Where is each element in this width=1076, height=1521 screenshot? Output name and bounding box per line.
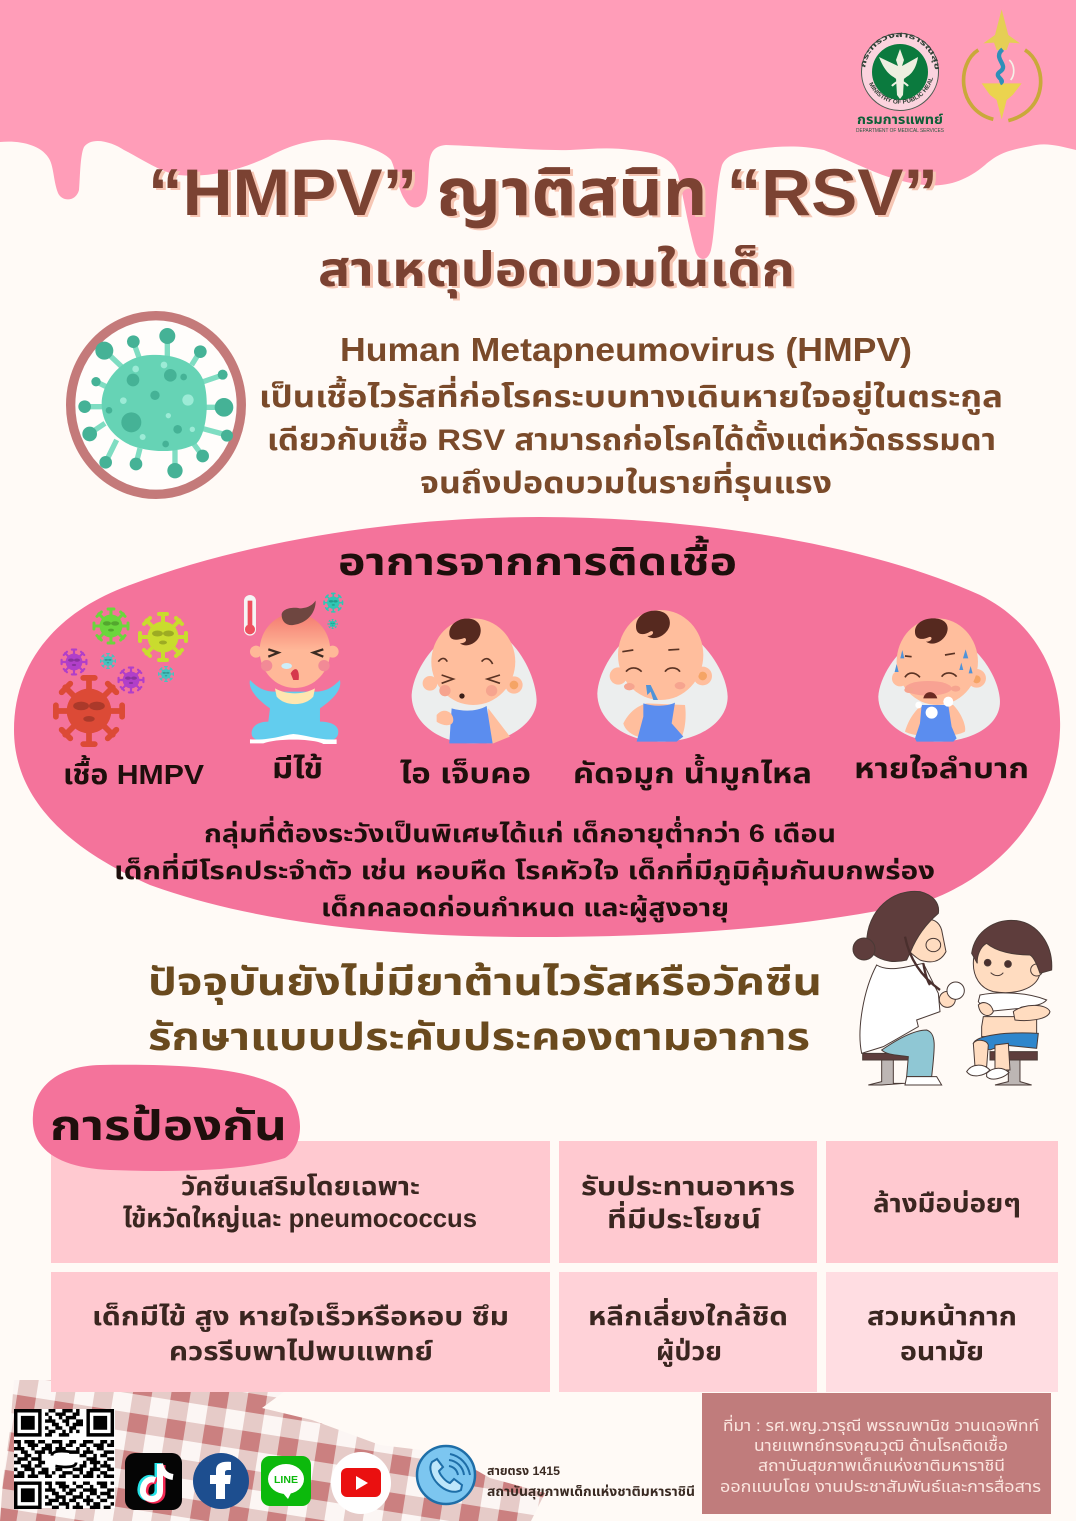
card: nutrition: รับประทานอาหาร <box>581 1171 795 1201</box>
card: see a doctor: ควรรีบพาไปพบแพทย์ <box>169 1336 433 1366</box>
card: vaccines <box>51 1141 550 1263</box>
icon: coughing baby <box>412 618 537 743</box>
source box: นายแพทย์ทรงคุณวุฒิ ด้านโรคติดเชื้อ <box>754 1434 1008 1455</box>
logo: Department of Medical Services: DEPARTMENT OF MEDICAL SERVICES <box>856 128 945 134</box>
treatment statement: ปัจจุบันยังไม่มียาต้านไวรัสหรือวัคซีน <box>148 962 822 1005</box>
panel: symptoms <box>14 517 1060 937</box>
card: nutrition: ที่มีประโยชน์ <box>607 1201 761 1234</box>
source box: สถาบันสุขภาพเด็กแห่งชาติมหาราชินี <box>758 1457 1005 1475</box>
icon: HMPV virus in ring <box>71 316 241 494</box>
panel: prevention cards <box>51 1141 1058 1392</box>
risk groups text: เด็กคลอดก่อนกำหนด และผู้สูงอายุ <box>321 894 729 923</box>
icon: baby with runny nose <box>597 610 728 742</box>
icon: LINE <box>261 1456 311 1506</box>
treatment statement: รักษาแบบประคับประคองตามอาการ <box>148 1017 810 1059</box>
intro text block: เดียวกับเชื้อ RSV สามารถก่อโรคได้ตั้งแต่หวัดธรรมดา <box>267 418 996 457</box>
card: wear a mask: อนามัย <box>900 1336 984 1366</box>
card: wear a mask <box>826 1272 1058 1392</box>
icon: baby with fever <box>244 593 343 744</box>
card: see a doctor: เด็กมีไข้ สูง หายใจเร็วหรือหอบ ซึม <box>92 1301 509 1332</box>
QR code <box>14 1409 115 1509</box>
hotline text: สายตรง 1415 <box>487 1464 560 1478</box>
card: avoid patients: หลีกเลี่ยงใกล้ชิด <box>588 1298 788 1331</box>
intro text block <box>259 331 1003 501</box>
prevention heading pill: การป้องกัน <box>50 1102 287 1149</box>
risk groups text: เด็กที่มีโรคประจำตัว เช่น หอบหืด โรคหัวใจ เด็กที่มีภูมิคุ้มกันบกพร่อง <box>114 853 935 886</box>
logo: Department of Medical Services <box>856 32 945 134</box>
source box <box>702 1393 1051 1514</box>
card: wash hands: ล้างมือบ่อยๆ <box>873 1188 1021 1218</box>
card: avoid patients <box>559 1272 817 1392</box>
hotline text: สถาบันสุขภาพเด็กแห่งชาติมหาราชินี <box>487 1484 695 1499</box>
icon: doctor examining child <box>853 891 1052 1085</box>
card: vaccines: ไข้หวัดใหญ่และ pneumococcus <box>123 1203 477 1233</box>
panel background blob <box>14 517 1060 937</box>
label: cough, sore throat: ไอ เจ็บคอ <box>400 758 531 789</box>
logo: Department of Medical Services: กรมการแพทย์ <box>857 112 943 127</box>
risk groups text <box>114 816 935 923</box>
icon: baby with difficulty breathing <box>878 618 1000 742</box>
hotline text <box>487 1464 695 1499</box>
card: vaccines: วัคซีนเสริมโดยเฉพาะ <box>181 1171 420 1201</box>
treatment statement <box>148 962 822 1059</box>
icon: colourful viruses <box>56 609 186 744</box>
subtitle: สาเหตุปอดบวมในเด็ก <box>318 244 795 299</box>
intro text block: Human Metapneumovirus (HMPV) <box>340 331 912 368</box>
icon: YouTube <box>331 1452 391 1514</box>
source box: ออกแบบโดย งานประชาสัมพันธ์และการสื่อสาร <box>720 1475 1041 1496</box>
icon: phone hotline <box>417 1446 475 1504</box>
label: difficulty breathing: หายใจลำบาก <box>854 753 1029 784</box>
card: see a doctor <box>51 1272 550 1392</box>
prevention heading pill <box>33 1065 300 1171</box>
card: wash hands <box>826 1141 1058 1263</box>
label: stuffy and runny nose: คัดจมูก น้ำมูกไหล <box>573 753 812 791</box>
intro text block: จนถึงปอดบวมในรายที่รุนแรง <box>420 461 832 501</box>
label: fever: มีไข้ <box>272 753 323 784</box>
title: “HMPV” ญาติสนิท “RSV” <box>148 155 938 229</box>
source box: ที่มา : รศ.พญ.วารุณี พรรณพานิช วานเดอพิทท์ <box>723 1414 1039 1435</box>
label: HMPV: เชื้อ HMPV <box>63 754 204 790</box>
symptoms heading: อาการจากการติดเชื้อ <box>338 535 737 584</box>
intro text block: เป็นเชื้อไวรัสที่ก่อโรคระบบทางเดินหายใจอยู่ในตระกูล <box>259 375 1003 415</box>
icon: LINE: LINE <box>274 1475 298 1486</box>
icon: TikTok <box>125 1453 182 1510</box>
checkered cloth <box>0 1380 545 1521</box>
logo: royal child health emblem <box>964 9 1041 121</box>
logo: Department of Medical Services: กระทรวงสาธารณสุข <box>862 32 939 70</box>
risk groups text: กลุ่มที่ต้องระวังเป็นพิเศษได้แก่ เด็กอายุต่ำกว่า 6 เดือน <box>204 816 836 849</box>
card: wear a mask: สวมหน้ากาก <box>867 1301 1017 1331</box>
card: nutrition <box>559 1141 817 1263</box>
pink dripping header <box>0 0 1076 259</box>
icon: Facebook <box>193 1453 249 1509</box>
card: avoid patients: ผู้ป่วย <box>656 1336 722 1367</box>
